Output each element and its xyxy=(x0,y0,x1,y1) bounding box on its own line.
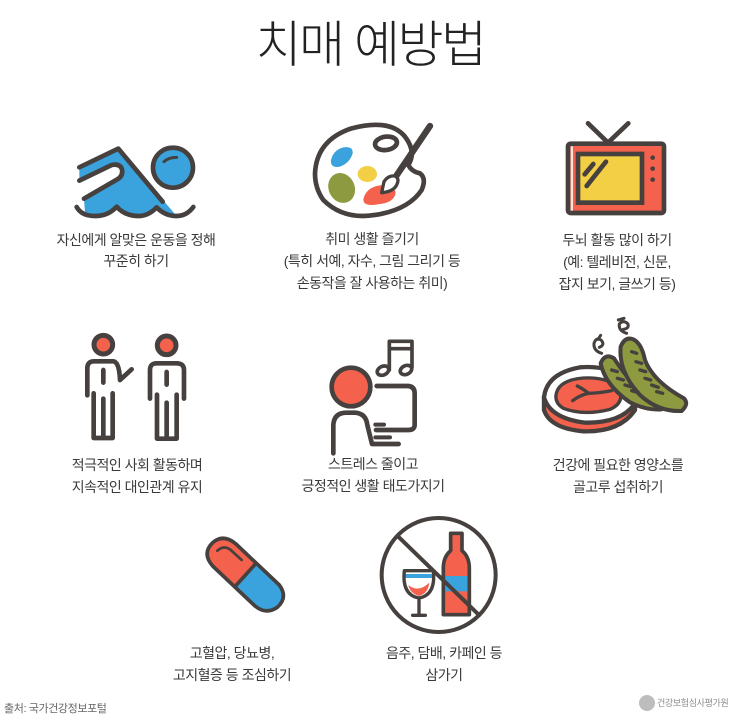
text: hobby: 취미 생활 즐기기 xyxy=(325,231,419,247)
text: hobby: 손동작을 잘 사용하는 취미) xyxy=(297,275,447,291)
source credit: 출처: 국가건강정보포털 xyxy=(4,702,107,715)
text: exercise: 자신에게 알맞은 운동을 정해 xyxy=(57,232,215,248)
logo: health insurance review agency xyxy=(639,695,728,711)
text: reduce stress xyxy=(302,456,444,494)
text: social activity: 지속적인 대인관계 유지 xyxy=(72,479,202,495)
logo: health insurance review agency: 건강보험심사평가원 xyxy=(657,698,728,708)
text: nutrition: 골고루 섭취하기 xyxy=(573,479,663,495)
title: 치매 예방법 xyxy=(256,17,484,73)
text: alcohol and tobacco: 삼가기 xyxy=(425,667,463,683)
text: nutrition: 건강에 필요한 영양소를 xyxy=(553,457,684,473)
text: brain activity xyxy=(559,232,675,292)
icon: capsule pill xyxy=(207,538,283,611)
text: exercise: 꾸준히 하기 xyxy=(103,253,169,269)
text: social activity xyxy=(72,457,202,495)
icon: no alcohol xyxy=(382,518,496,632)
icon: palette xyxy=(315,125,430,216)
icon: salmon steak and peas xyxy=(544,318,686,431)
text: exercise xyxy=(57,232,215,269)
icon: person at computer with music note xyxy=(332,341,415,453)
icon: two people talking xyxy=(87,335,184,439)
icon: swimmer xyxy=(77,148,193,216)
text: reduce stress: 긍정적인 생활 태도가지기 xyxy=(302,478,444,494)
icon: television xyxy=(568,123,664,213)
text: reduce stress: 스트레스 줄이고 xyxy=(328,456,419,472)
text: chronic disease xyxy=(173,645,291,683)
text: brain activity: 두뇌 활동 많이 하기 xyxy=(562,232,672,248)
text: hobby xyxy=(284,231,461,291)
text: hobby: (특히 서예, 자수, 그림 그리기 등 xyxy=(284,253,461,269)
text: nutrition xyxy=(553,457,684,495)
text: alcohol and tobacco: 음주, 담배, 카페인 등 xyxy=(386,645,503,661)
text: alcohol and tobacco xyxy=(386,645,503,683)
text: chronic disease: 고지혈증 등 조심하기 xyxy=(173,667,291,683)
text: chronic disease: 고혈압, 당뇨병, xyxy=(190,645,274,661)
text: brain activity: 잡지 보기, 글쓰기 등) xyxy=(559,276,675,292)
text: social activity: 적극적인 사회 활동하며 xyxy=(72,457,202,473)
text: brain activity: (예: 텔레비전, 신문, xyxy=(563,254,671,270)
